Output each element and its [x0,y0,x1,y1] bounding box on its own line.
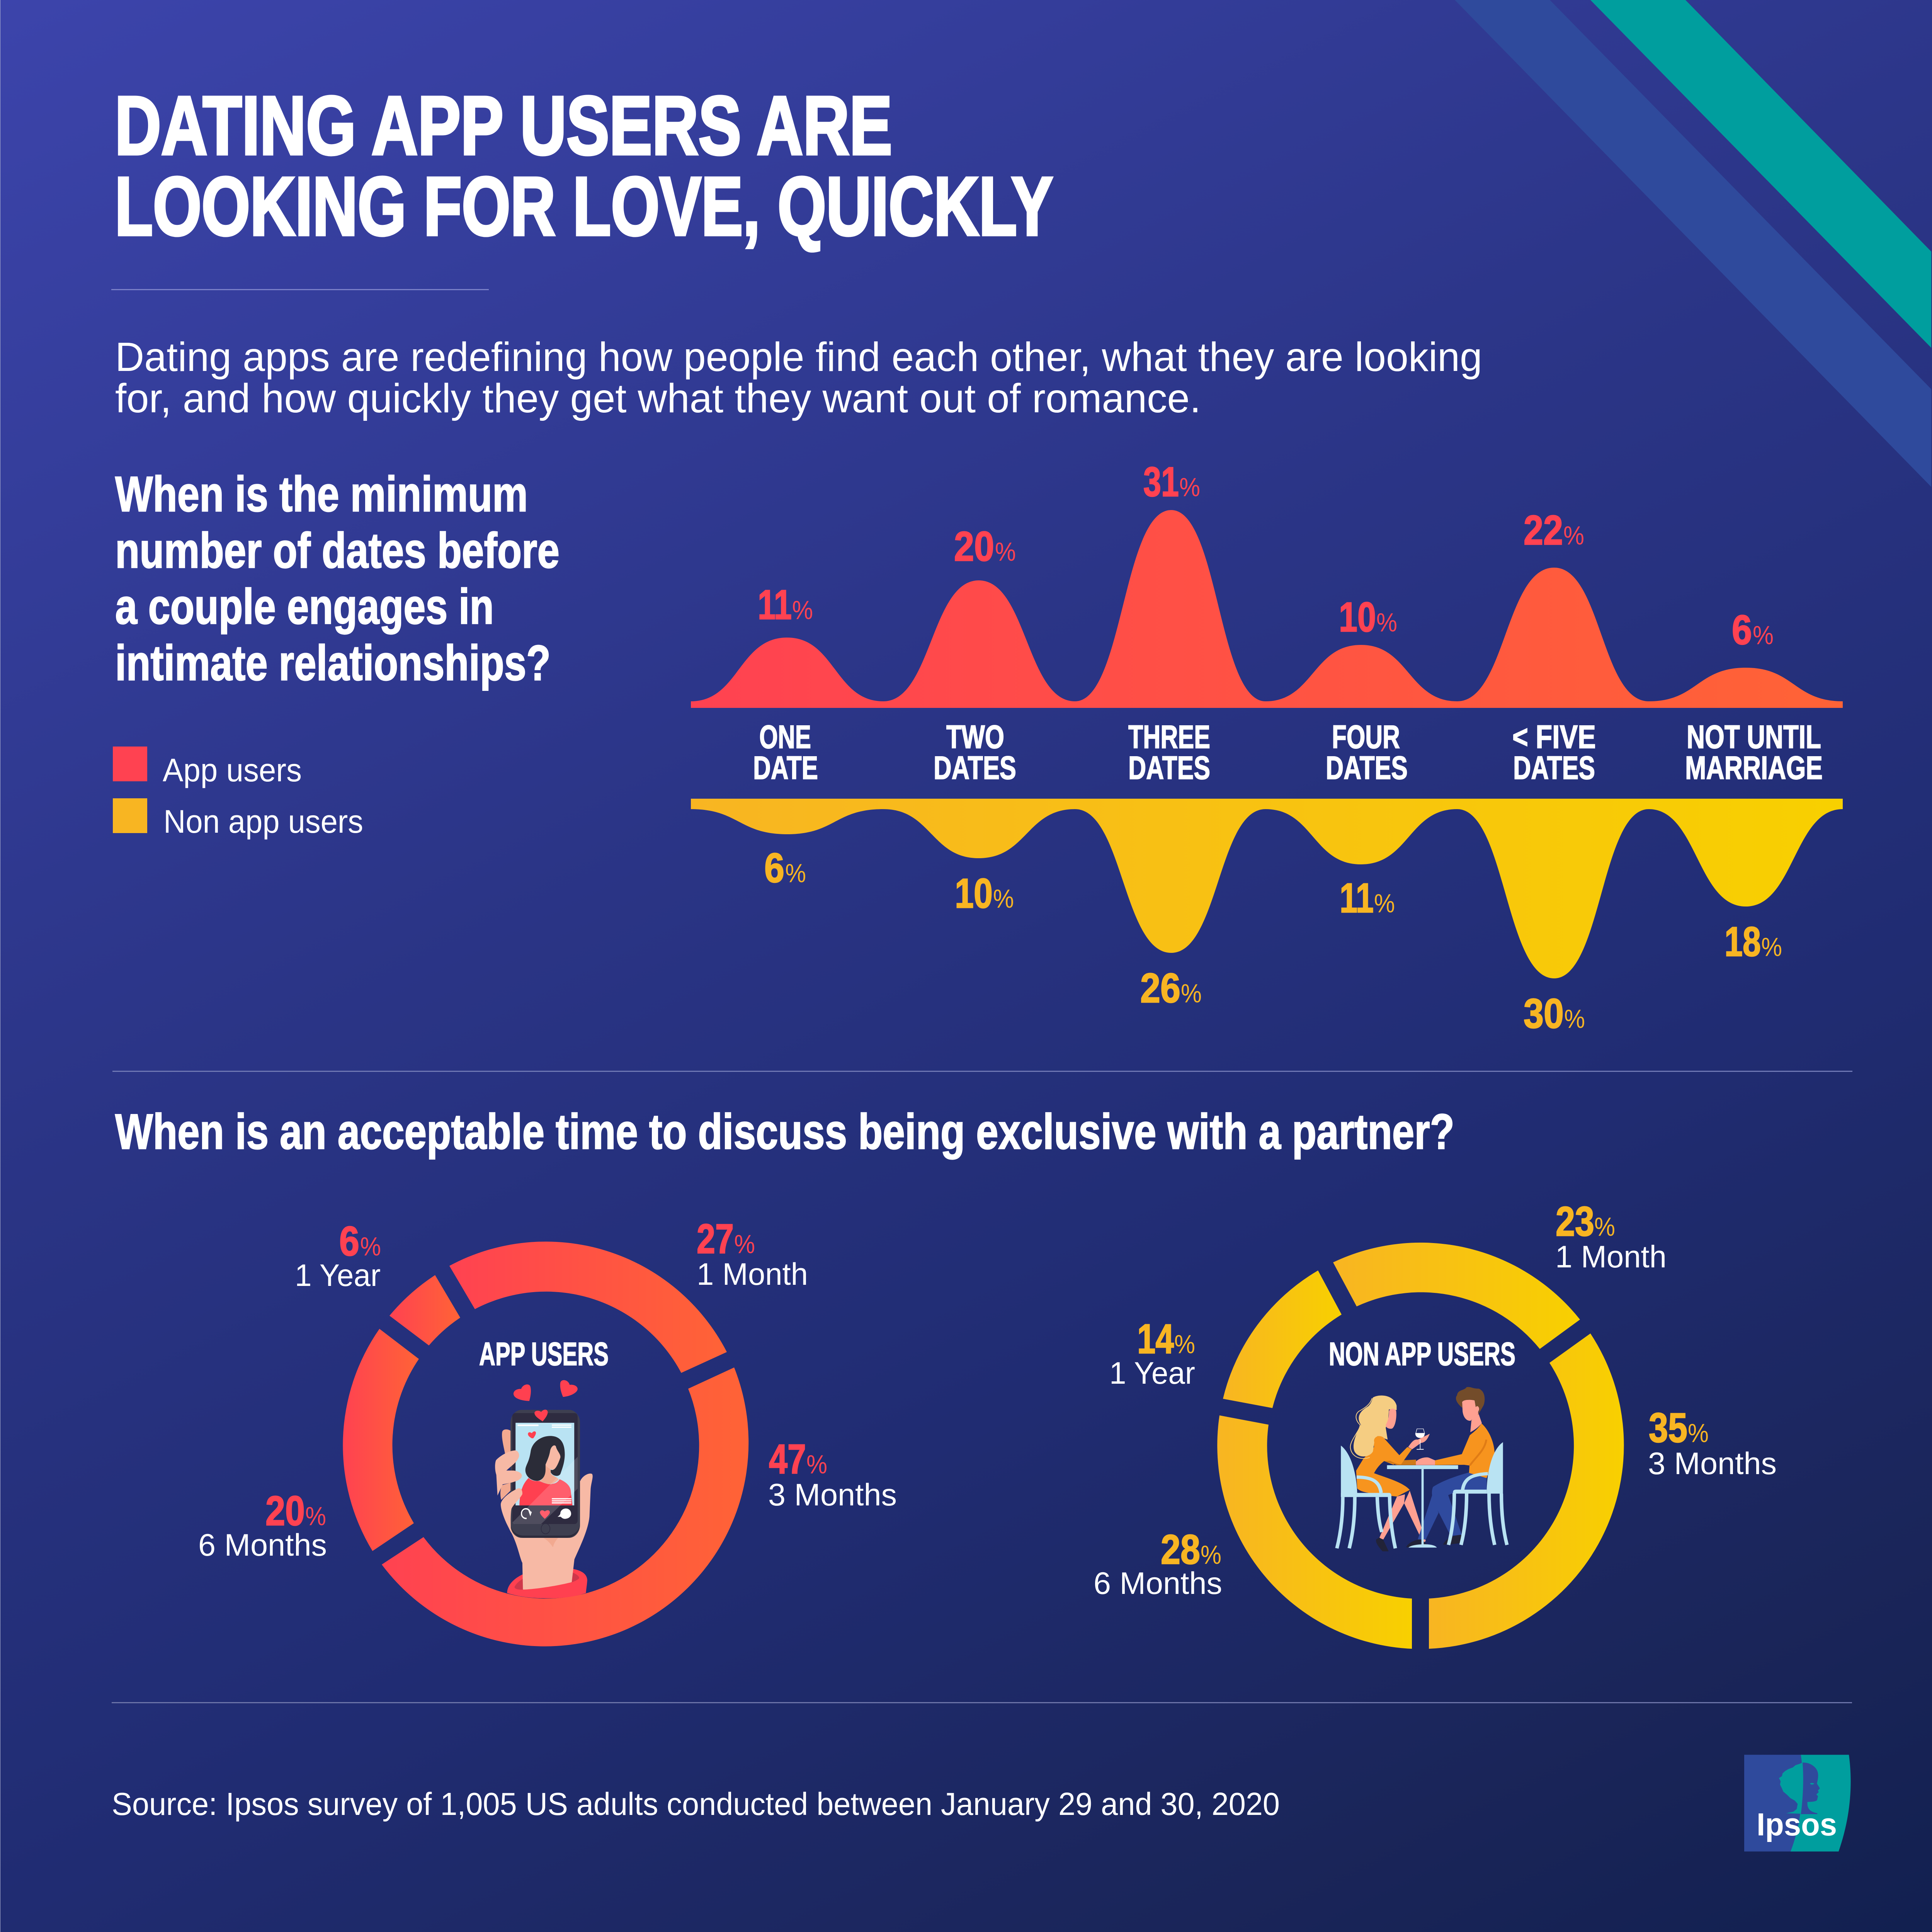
value: 14% 1 Year [1109,1315,1195,1391]
donut label: app users: APP USERS [479,1336,609,1372]
app users values: % [1753,621,1774,650]
non app users values: % [1564,1004,1585,1034]
value: 14% 1 Year: 1 Year [1109,1356,1195,1391]
category labels: MARRIAGE [1685,750,1823,786]
value: 35% 3 Months: % [1688,1418,1709,1448]
non app users values: 10 [955,870,993,917]
category labels: DATES [1128,750,1210,786]
value: 20% 6 Months: 6 Months [198,1528,327,1563]
title: LOOKING FOR LOVE, QUICKLY [115,160,1053,253]
value: 20% 6 Months: % [305,1502,326,1531]
value: 47% 3 Months: 3 Months [768,1478,897,1512]
legend: App users [163,752,302,788]
non app users values: % [1181,979,1202,1008]
category labels: THREE [1128,719,1210,755]
value: 23% 1 Month [1555,1198,1667,1274]
non app users values: 30 [1524,990,1564,1037]
value: 6% 1 Year: 6 [339,1218,359,1264]
donut: non app users [1217,1243,1624,1649]
app users values: 20 [954,523,994,570]
app users values [758,458,1774,653]
non app users values [764,844,1782,1037]
non app users values: % [993,884,1014,913]
heading: minimum number of dates question: intimate relationships? [115,635,551,691]
app users values: 22 [1524,507,1563,553]
value: 35% 3 Months [1648,1404,1777,1481]
intro text [115,334,1482,421]
value: 14% 1 Year: % [1174,1330,1195,1359]
value: 28% 6 Months: % [1201,1540,1221,1570]
wave chart: non app users [691,799,1843,978]
value: 27% 1 Month: % [734,1230,755,1259]
value: 23% 1 Month: 23 [1556,1198,1594,1245]
title: DATING APP USERS ARE [115,79,892,172]
title [115,79,1053,253]
non app users values: % [1761,932,1782,962]
intro text: Dating apps are redefining how people find each other, what they are looking [115,334,1482,380]
category labels: TWO [946,719,1004,755]
heading: exclusivity question: When is an acceptable time to discuss being exclusive with a partner? [115,1104,1454,1160]
value: 20% 6 Months: 20 [265,1487,305,1534]
app users values: 6 [1732,606,1752,653]
non app users values: 6 [764,844,784,891]
logo: Ipsos [1744,1755,1851,1852]
source note: Source: Ipsos survey of 1,005 US adults conducted between January 29 and 30, 2020 [112,1786,1280,1822]
app users values: % [995,537,1016,566]
category labels: FOUR [1332,719,1400,755]
heading: minimum number of dates question: number of dates before [115,523,560,578]
category labels: NOT UNTIL [1687,719,1821,755]
value: 23% 1 Month: 1 Month [1555,1240,1667,1274]
category labels: DATES [934,750,1016,786]
value: 47% 3 Months [768,1435,897,1512]
value: 6% 1 Year [295,1218,381,1293]
app users values: 31 [1143,458,1179,505]
intro text: for, and how quickly they get what they want out of romance. [115,376,1201,421]
category labels: < FIVE [1512,719,1596,755]
wave chart: app users [691,510,1843,708]
value: 35% 3 Months: 35 [1649,1404,1687,1451]
heading: minimum number of dates question: When is the minimum [115,466,528,522]
value: 28% 6 Months [1094,1526,1222,1601]
app users values: 11 [758,581,792,628]
logo: Ipsos: Ipsos [1757,1806,1837,1842]
donut label: non app users: NON APP USERS [1329,1336,1515,1372]
app users values: % [1376,608,1397,637]
non app users values: 26 [1140,964,1180,1011]
value: 14% 1 Year: 14 [1137,1315,1174,1362]
heading: minimum number of dates question: a couple engages in [115,579,494,634]
value: 35% 3 Months: 3 Months [1648,1446,1777,1481]
heading: minimum number of dates question [115,466,560,691]
category labels: ONE [759,719,811,755]
value: 47% 3 Months: % [806,1450,827,1479]
non app users values: 18 [1725,918,1761,965]
value: 20% 6 Months [198,1487,327,1563]
app users values: % [1179,473,1200,502]
corner stripes [1455,0,1931,487]
category labels: DATES [1326,750,1408,786]
category labels: DATE [753,750,818,786]
donut: app users [343,1242,748,1646]
value: 27% 1 Month: 1 Month [697,1257,808,1292]
category labels: DATES [1513,750,1595,786]
value: 28% 6 Months: 28 [1161,1526,1200,1573]
non app users values: % [1374,889,1395,918]
value: 23% 1 Month: % [1594,1212,1615,1242]
value: 28% 6 Months: 6 Months [1094,1566,1222,1601]
value: 6% 1 Year: % [360,1232,381,1261]
value: 27% 1 Month: 27 [697,1215,734,1262]
legend [113,747,363,840]
app users values: % [792,595,813,625]
non app users values: 11 [1340,874,1374,921]
category labels [753,719,1823,786]
icon: couple at table [1337,1387,1507,1551]
app users values: % [1563,521,1584,550]
legend: Non app users [163,803,363,840]
icon: hand holding phone [495,1380,593,1598]
value: 47% 3 Months: 47 [769,1435,806,1482]
value: 6% 1 Year: 1 Year [295,1258,381,1293]
non app users values: % [785,859,806,888]
app users values: 10 [1339,594,1376,640]
value: 27% 1 Month [697,1215,808,1292]
